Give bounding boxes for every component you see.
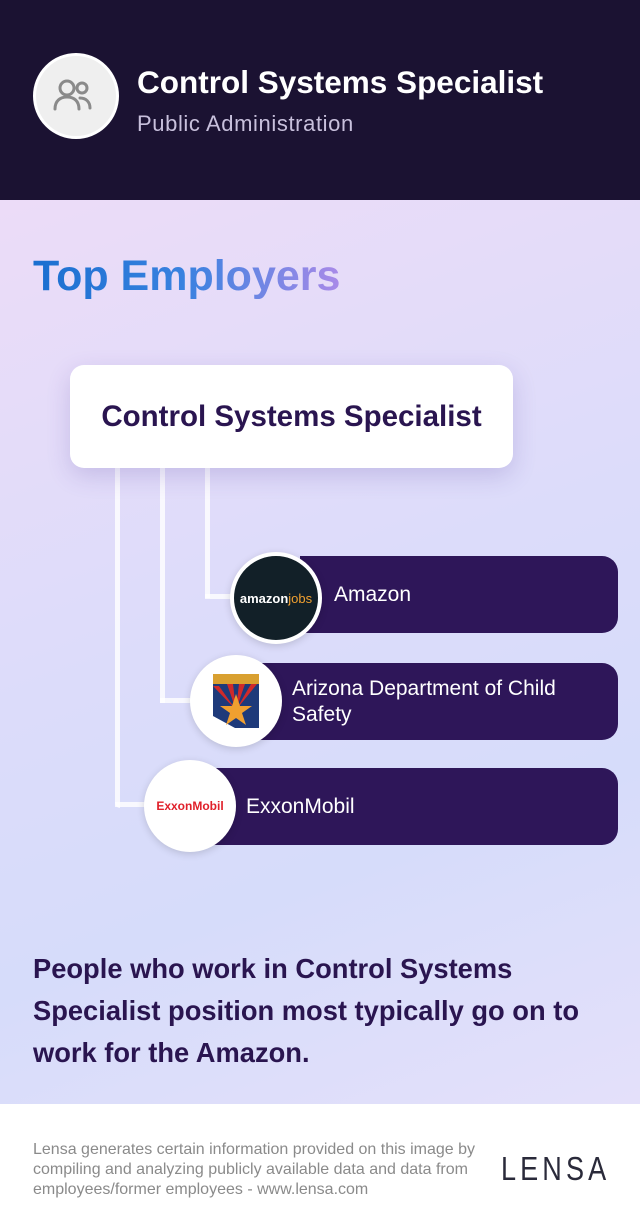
header bbox=[0, 0, 640, 200]
disclaimer: Lensa generates certain information provided on this image by bbox=[33, 1141, 475, 1158]
summary text: People who work in Control Systems bbox=[33, 953, 512, 984]
logo: LENSA bbox=[501, 1150, 610, 1187]
summary text: work for the Amazon. bbox=[33, 1037, 310, 1068]
center box: Control Systems Specialist bbox=[101, 400, 482, 432]
employer: Amazon: amazon bbox=[240, 590, 288, 606]
employer: ExxonMobil bbox=[142, 760, 618, 856]
heading: Top Employers bbox=[33, 252, 340, 300]
footer bbox=[0, 1104, 640, 1232]
summary text bbox=[32, 953, 579, 1068]
disclaimer: compiling and analyzing publicly available data and data from bbox=[33, 1161, 468, 1178]
employer: Arizona bbox=[188, 654, 618, 752]
connector lines bbox=[115, 468, 230, 808]
main panel bbox=[0, 200, 640, 1104]
disclaimer: employees/former employees - www.lensa.com bbox=[33, 1181, 368, 1198]
employer: Amazon bbox=[228, 552, 618, 648]
center box bbox=[70, 365, 513, 468]
title: Control Systems Specialist bbox=[137, 64, 543, 100]
summary text: Specialist position most typically go on to bbox=[33, 995, 579, 1026]
employer: ExxonMobil: ExxonMobil bbox=[156, 799, 224, 813]
icon: avatar bbox=[33, 53, 119, 139]
disclaimer bbox=[33, 1141, 475, 1198]
employer: Arizona: Safety bbox=[292, 702, 352, 726]
subtitle: Public Administration bbox=[137, 111, 354, 136]
employer: Amazon: Amazon bbox=[334, 582, 411, 606]
employer: Amazon: jobs bbox=[288, 590, 312, 606]
employer: ExxonMobil: ExxonMobil bbox=[246, 794, 355, 818]
employer: Arizona: Arizona Department of Child bbox=[292, 676, 556, 700]
